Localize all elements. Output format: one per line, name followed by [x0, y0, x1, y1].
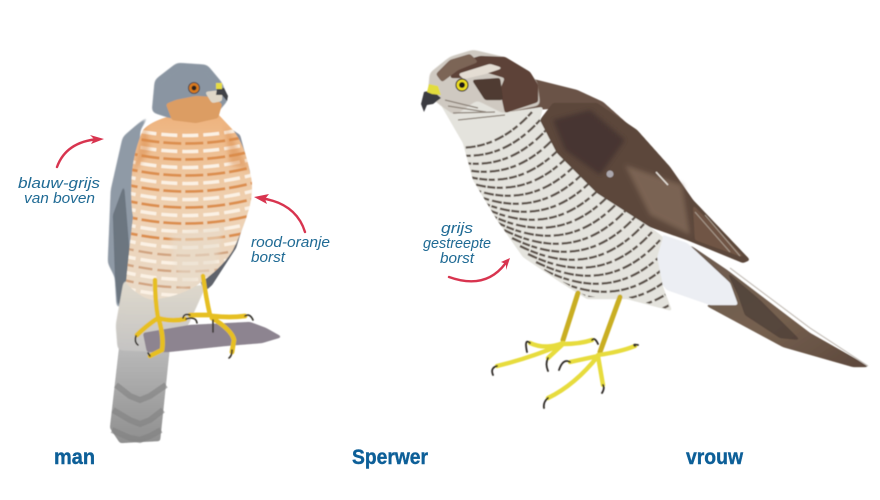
breast with orange barring [120, 113, 260, 300]
bird: male sparrowhawk [108, 63, 282, 443]
tail [110, 340, 170, 443]
title: Sperwer: Sperwer [352, 446, 428, 469]
tail [687, 243, 870, 367]
bird: female sparrowhawk [408, 50, 870, 408]
belly [116, 280, 206, 352]
caption: man: man [54, 446, 95, 469]
breast with barring [442, 101, 672, 310]
label: grijs gestreepte borst: grijs [441, 220, 474, 237]
perch branch [143, 322, 282, 352]
back and wing [108, 111, 153, 310]
mantle [510, 76, 640, 135]
beak [421, 90, 441, 112]
label: grijs gestreepte borst [423, 220, 491, 267]
arrow: blauw-grijs [57, 135, 104, 167]
label: rood-oranje borst: rood-oranje [251, 234, 330, 251]
label: blauw-grijs van boven [18, 175, 101, 207]
label: blauw-grijs van boven: blauw-grijs [18, 175, 101, 192]
wing [540, 103, 750, 263]
label: blauw-grijs van boven: van boven [24, 190, 95, 207]
undertail coverts [648, 235, 738, 305]
label: rood-oranje borst [251, 234, 330, 266]
eye [188, 82, 200, 94]
legs and feet [135, 276, 253, 358]
head [152, 63, 228, 123]
arrow: gestreepte borst [449, 258, 510, 281]
head [421, 50, 540, 120]
label: grijs gestreepte borst: borst [440, 250, 475, 267]
arrow: rood-oranje [254, 194, 305, 232]
eye [456, 79, 468, 91]
beak [216, 88, 228, 101]
label: rood-oranje borst: borst [251, 249, 286, 266]
label: grijs gestreepte borst: gestreepte [423, 235, 491, 252]
legs and feet [492, 293, 638, 408]
caption: vrouw: vrouw [686, 446, 744, 469]
